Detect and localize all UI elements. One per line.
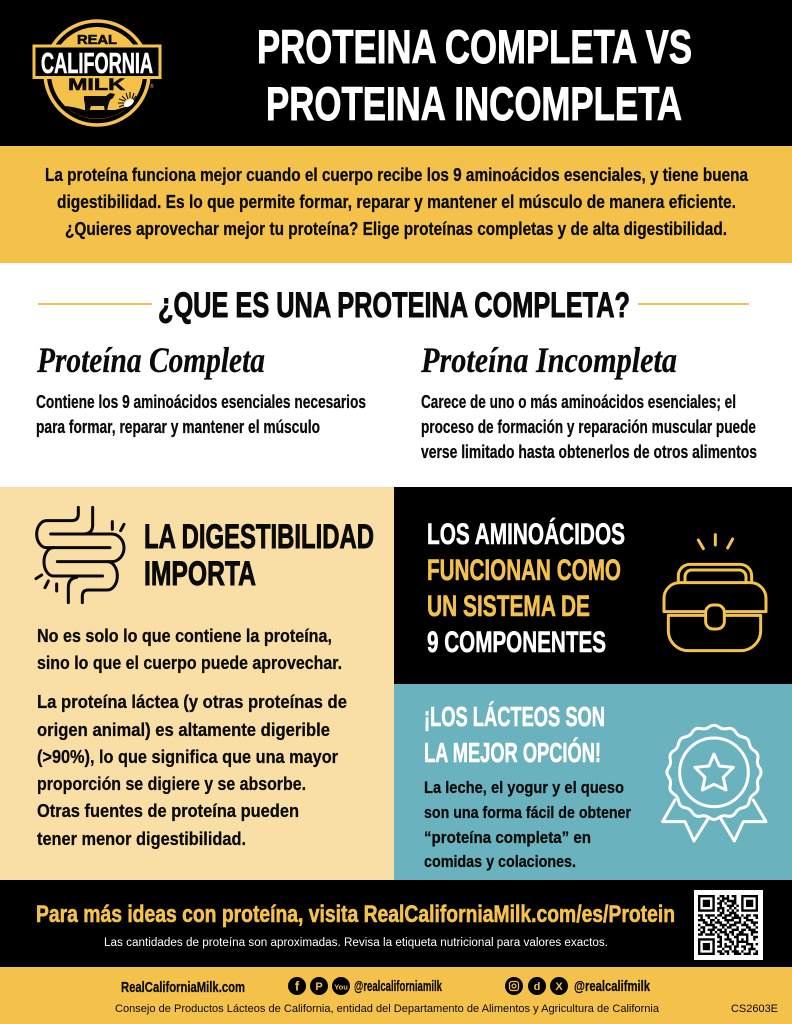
icon: toolbox bbox=[664, 535, 766, 651]
text: lacteos: comidas y colaciones. bbox=[424, 853, 576, 871]
column: proteina incompleta bbox=[420, 340, 757, 462]
text: lacteos: “proteína completa” en bbox=[424, 829, 591, 847]
icon: award badge bbox=[663, 725, 766, 841]
text: detalle digestibilidad: tener menor digestibilidad. bbox=[37, 829, 246, 849]
text: detalle digestibilidad: (>90%), lo que significa que una mayor bbox=[37, 747, 338, 767]
text: intro digestibilidad: sino lo que el cuerpo puede aprovechar. bbox=[37, 653, 342, 673]
text: lacteos: La leche, el yogur y el queso bbox=[424, 779, 624, 797]
panel: header bbox=[0, 0, 792, 146]
icons: facebook pinterest youtube bbox=[288, 977, 350, 995]
column: proteina completa: Proteína Completa bbox=[36, 340, 265, 380]
panel: footer bbox=[0, 967, 792, 1024]
text: code: CS2603E bbox=[731, 1003, 778, 1015]
text: lacteos: son una forma fácil de obtener bbox=[424, 804, 631, 822]
icon: QR code bbox=[694, 890, 763, 960]
heading: aminoacidos: 9 COMPONENTES bbox=[427, 626, 606, 659]
panel: call to action bbox=[0, 880, 792, 967]
column: proteina completa: Contiene los 9 aminoácidos esenciales necesarios bbox=[36, 392, 366, 412]
panel: definition bbox=[0, 263, 792, 487]
heading: los lacteos bbox=[424, 701, 605, 768]
heading: la digestibilidad importa bbox=[144, 518, 374, 593]
heading: que es una proteina completa: ¿QUE ES UNA PROTEINA COMPLETA? bbox=[158, 286, 630, 325]
panel: lacteos bbox=[394, 684, 792, 880]
text: detalle digestibilidad: origen animal) es altamente digerible bbox=[37, 720, 330, 740]
text: detalle digestibilidad: La proteína láctea (y otras proteínas de bbox=[37, 692, 347, 712]
heading: los lacteos: LA MEJOR OPCIÓN! bbox=[424, 737, 601, 768]
logo: Real California Milk: MILK bbox=[68, 75, 126, 94]
icons: instagram tiktok x bbox=[505, 977, 568, 995]
icons: instagram tiktok x: X bbox=[555, 981, 563, 993]
text: lacteos bbox=[424, 779, 631, 871]
text: handle realcalifmilk: @realcalifmilk bbox=[574, 978, 650, 995]
icon: cow bbox=[84, 93, 115, 112]
heading: aminoacidos: FUNCIONAN COMO bbox=[427, 554, 621, 587]
icons: facebook pinterest youtube: f bbox=[295, 978, 300, 994]
icons: instagram tiktok x: d bbox=[534, 981, 540, 993]
intro text bbox=[45, 165, 749, 239]
text: handle realcaliforniamilk: @realcaliforniamilk bbox=[354, 978, 442, 995]
column: proteina completa: para formar, reparar y mantener el músculo bbox=[36, 417, 320, 437]
logo: Real California Milk: REAL bbox=[77, 32, 117, 47]
logo: Real California Milk: ® bbox=[150, 83, 154, 90]
heading: aminoacidos bbox=[427, 517, 625, 659]
column: proteina completa bbox=[36, 340, 366, 437]
heading: la digestibilidad importa: LA DIGESTIBILIDAD bbox=[144, 518, 374, 556]
text: detalle digestibilidad bbox=[37, 692, 347, 849]
icons: facebook pinterest youtube: P bbox=[315, 981, 323, 993]
heading: los lacteos: ¡LOS LÁCTEOS SON bbox=[424, 701, 605, 732]
panel: digestibilidad bbox=[0, 487, 394, 880]
text: disclaimer: Las cantidades de proteína son aproximadas. Revisa la etiqueta nutricional para valores exactos. bbox=[104, 937, 608, 949]
title bbox=[257, 20, 692, 130]
heading: la digestibilidad importa: IMPORTA bbox=[144, 555, 256, 593]
panel: intro bbox=[0, 146, 792, 263]
text: intro digestibilidad: No es solo lo que contiene la proteína, bbox=[37, 626, 332, 646]
column: proteina incompleta: Proteína Incompleta bbox=[420, 340, 677, 380]
heading: aminoacidos: UN SISTEMA DE bbox=[427, 590, 590, 623]
logo: Real California Milk bbox=[34, 21, 160, 125]
text: council: Consejo de Productos Lácteos de California, entidad del Departamento de Alimentos y Agricultura de California bbox=[115, 1003, 660, 1015]
text: detalle digestibilidad: proporción se digiere y se absorbe. bbox=[37, 774, 306, 794]
icons: facebook pinterest youtube: You bbox=[334, 982, 348, 992]
icon: intestine bbox=[36, 507, 124, 603]
heading: aminoacidos: LOS AMINOÁCIDOS bbox=[427, 517, 625, 551]
text: intro digestibilidad bbox=[37, 626, 342, 673]
text: website: RealCaliforniaMilk.com bbox=[121, 979, 245, 996]
logo: Real California Milk: CALIFORNIA bbox=[41, 48, 153, 80]
icon: sun bbox=[118, 92, 136, 109]
text: detalle digestibilidad: Otras fuentes de proteína pueden bbox=[37, 801, 299, 821]
panel: aminoacidos bbox=[394, 487, 792, 684]
